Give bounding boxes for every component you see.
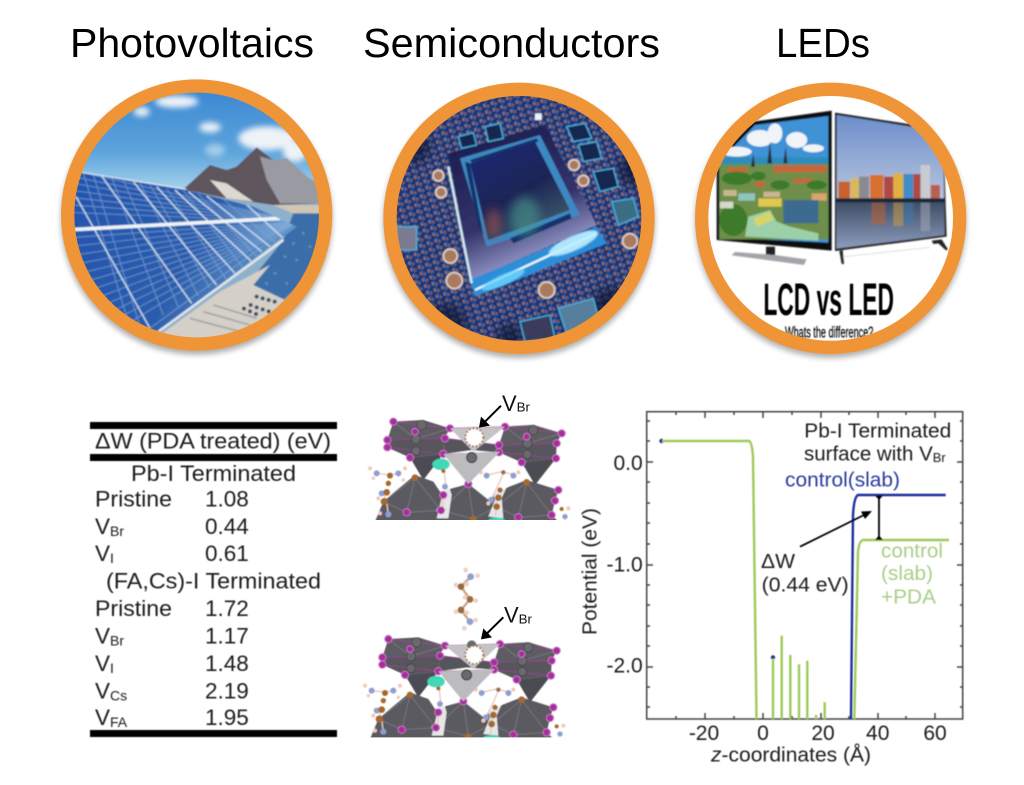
- led caption heading: LCD vs LED: [763, 274, 894, 325]
- y axis tick labels: -1.0: [607, 554, 643, 577]
- series label: control slab PDA: +PDA: [881, 585, 936, 608]
- row: VI: I: [110, 550, 114, 566]
- row: pristine 2: 1.72: [205, 596, 249, 621]
- annotation: delta W value: (0.44 eV): [762, 574, 849, 597]
- x axis tick labels: 40: [866, 722, 889, 745]
- bracket: work function difference: [875, 496, 883, 540]
- row: VI 2: 1.48: [205, 651, 249, 676]
- row: VI: V: [95, 541, 110, 566]
- label VBr: Br: [517, 400, 531, 415]
- x axis tick labels: 60: [923, 722, 947, 745]
- row: VBr: Br: [110, 523, 124, 539]
- label VBr 2: Br: [519, 611, 533, 626]
- row: VFA: [95, 705, 249, 730]
- row: VCs: V: [95, 678, 110, 704]
- row: VBr 2: 1.17: [205, 624, 249, 648]
- row: VBr: 0.44: [205, 514, 249, 539]
- title: LEDs: LEDs: [776, 20, 870, 66]
- row: VBr 2: Br: [110, 632, 124, 648]
- series label: control slab: control(slab): [785, 469, 900, 492]
- row: VBr 2: V: [95, 624, 110, 648]
- title: Photovoltaics: Photovoltaics: [70, 20, 314, 66]
- y axis tick labels: [607, 452, 643, 678]
- series: control slab: [660, 440, 946, 719]
- row: VI 2: V: [95, 651, 110, 676]
- row: VCs: Cs: [110, 688, 127, 704]
- row: VI: 0.61: [205, 541, 249, 566]
- crystal structure: surface with PDA: [363, 603, 565, 742]
- chart annotation title: Pb-I Terminated: [804, 419, 951, 442]
- series label: control slab PDA: (slab): [881, 562, 933, 585]
- row: VFA: 1.95: [205, 705, 249, 730]
- section: (FA,Cs)-I terminated: (FA,Cs)-I Terminated: [106, 568, 321, 594]
- row: VFA: V: [95, 705, 110, 730]
- y axis tick labels: -2.0: [607, 655, 643, 678]
- label VBr 2: V: [504, 603, 519, 628]
- row: pristine 2: [95, 596, 249, 621]
- row: VBr: [95, 514, 249, 539]
- row: VBr 2: [95, 624, 249, 648]
- title: Semiconductors: Semiconductors: [363, 20, 660, 66]
- row: VBr: V: [95, 514, 110, 539]
- chart: potential versus z-coordinates: [579, 412, 963, 767]
- x axis tick labels: [689, 722, 947, 745]
- y axis title: Potential (eV): [579, 508, 602, 635]
- row: VI: [95, 541, 249, 566]
- row: VI 2: I: [110, 660, 114, 676]
- row: pristine: [95, 486, 249, 512]
- row: pristine 2: Pristine: [95, 596, 172, 621]
- row: VCs: [95, 678, 249, 704]
- chart annotation title: surface with V: [804, 443, 933, 466]
- series: control slab plus PDA: [662, 441, 949, 719]
- photo circle: semiconductor chip: [383, 87, 655, 358]
- series label: control slab PDA: control: [881, 540, 943, 563]
- chart frame: [647, 412, 963, 719]
- arrow: delta W: [800, 511, 872, 547]
- row: pristine: Pristine: [95, 486, 172, 512]
- photo circle: LCD vs LED televisions: [695, 87, 966, 358]
- annotation: delta W value: [761, 550, 849, 597]
- arrow to vacancy: [479, 406, 501, 428]
- PDA molecule: [454, 568, 480, 631]
- crystal structure: surface with bromine vacancy: [368, 391, 570, 524]
- x axis title: z-coordinates (Å): [710, 744, 871, 767]
- table: work function shift: [90, 422, 337, 737]
- chart annotation title: [804, 419, 951, 466]
- row: VI 2: [95, 651, 249, 676]
- led caption question: Whats the difference?: [785, 325, 873, 342]
- series label: control slab PDA: [881, 540, 943, 608]
- table header: ΔW (PDA treated) (eV): [95, 428, 331, 454]
- y axis tick labels: 0.0: [613, 452, 643, 475]
- label VBr: V: [502, 391, 517, 416]
- arrow to vacancy 2: [481, 617, 503, 639]
- x axis tick labels: 20: [811, 722, 835, 745]
- x axis tick labels: 0: [757, 722, 769, 745]
- section: Pb-I terminated: Pb-I Terminated: [131, 461, 296, 486]
- photo circle: solar panels: [60, 83, 332, 394]
- row: VFA: FA: [110, 714, 128, 730]
- x axis tick labels: -20: [689, 722, 719, 745]
- annotation: delta W value: ΔW: [761, 550, 796, 573]
- row: pristine: 1.08: [205, 486, 249, 512]
- chart annotation title: Br: [933, 450, 946, 465]
- row: VCs: 2.19: [205, 678, 249, 704]
